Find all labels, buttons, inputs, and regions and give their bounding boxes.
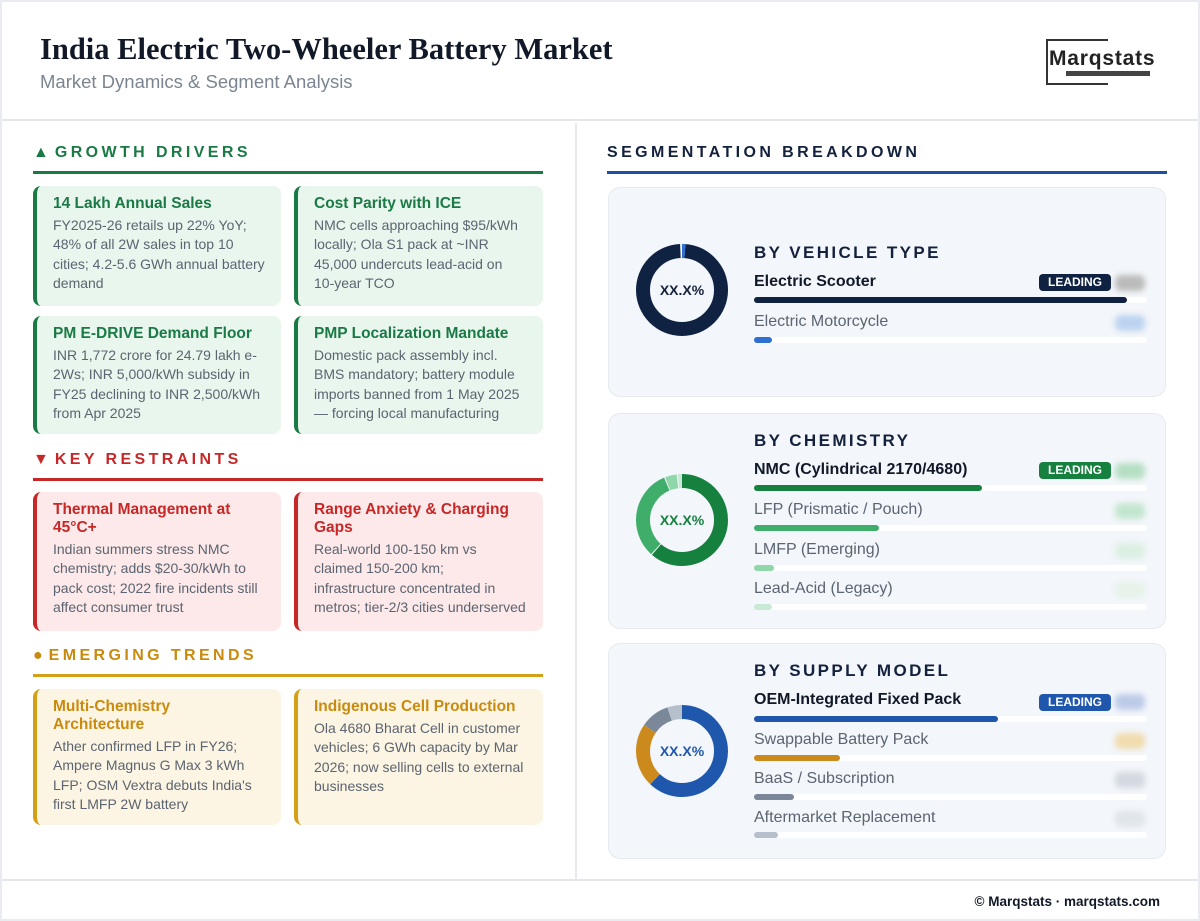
card: thermal: 45°C+ bbox=[53, 519, 97, 536]
card: PM E-DRIVE: 2Ws; INR 5,000/kWh subsidy in bbox=[53, 366, 250, 382]
card: PMP: Domestic pack assembly incl. bbox=[314, 347, 498, 363]
donut: supply: XX.X% bbox=[660, 743, 705, 759]
card: thermal bbox=[33, 492, 281, 631]
card: multi-chem bbox=[33, 689, 281, 825]
card: PMP: imports banned from 1 May 2025 bbox=[314, 386, 519, 402]
card: cost parity: locally; Ola S1 pack at ~INR bbox=[314, 236, 489, 252]
card: PM E-DRIVE: INR 1,772 crore for 24.79 lakh e- bbox=[53, 347, 257, 363]
card: 14 Lakh: 14 Lakh Annual Sales bbox=[53, 195, 212, 212]
card: PMP: BMS mandatory; battery module bbox=[314, 366, 515, 382]
card: 14 Lakh: cities; 4.2-5.6 GWh annual battery bbox=[53, 256, 265, 272]
subtitle: Market Dynamics & Segment Analysis bbox=[40, 71, 353, 92]
card: multi-chem: Architecture bbox=[53, 716, 144, 733]
donut: vehicle: XX.X% bbox=[660, 282, 705, 298]
card: cost parity: Cost Parity with ICE bbox=[314, 195, 461, 212]
card: 14 Lakh bbox=[33, 186, 281, 306]
card: range anxiety: infrastructure concentrated in bbox=[314, 580, 495, 596]
donut: chemistry bbox=[636, 474, 728, 566]
card: PM E-DRIVE: PM E-DRIVE Demand Floor bbox=[53, 325, 252, 342]
card: range anxiety: Range Anxiety & Charging bbox=[314, 501, 509, 518]
card: range anxiety bbox=[294, 492, 543, 631]
card: thermal: pack cost; 2022 fire incidents still bbox=[53, 580, 258, 596]
card: thermal: Thermal Management at bbox=[53, 501, 230, 518]
panel: supply model bbox=[608, 643, 1166, 859]
section heading: restraints: ▼ KEY RESTRAINTS bbox=[33, 451, 242, 468]
panel: chemistry: NMC (Cylindrical 2170/4680) bbox=[754, 461, 967, 478]
card: range anxiety: Gaps bbox=[314, 519, 353, 536]
panel: vehicle type bbox=[608, 187, 1166, 397]
card: cost parity: NMC cells approaching $95/kWh bbox=[314, 217, 518, 233]
donut: supply bbox=[636, 705, 728, 797]
panel: vehicle type: Electric Motorcycle bbox=[754, 313, 888, 330]
card: PM E-DRIVE: from Apr 2025 bbox=[53, 405, 141, 421]
panel: chemistry: Lead-Acid (Legacy) bbox=[754, 580, 893, 597]
card: 14 Lakh: demand bbox=[53, 275, 104, 291]
panel: supply model: OEM-Integrated Fixed Pack bbox=[754, 691, 961, 708]
card: range anxiety: Real-world 100-150 km vs bbox=[314, 541, 477, 557]
card: indigenous: Indigenous Cell Production bbox=[314, 698, 516, 715]
card: PM E-DRIVE bbox=[33, 316, 281, 434]
card: PMP bbox=[294, 316, 543, 434]
panel: chemistry: LMFP (Emerging) bbox=[754, 541, 880, 558]
panel: chemistry bbox=[608, 413, 1166, 629]
section heading: segmentation: SEGMENTATION BREAKDOWN bbox=[607, 144, 920, 161]
panel: supply model: BaaS / Subscription bbox=[754, 770, 895, 787]
divider bbox=[575, 123, 577, 880]
card: range anxiety: metros; tier-2/3 cities underserved bbox=[314, 599, 526, 615]
card: indigenous: vehicles; 6 GWh capacity by Mar bbox=[314, 739, 518, 755]
card: PM E-DRIVE: FY25 declining to INR 2,500/kWh bbox=[53, 386, 260, 402]
card: range anxiety: claimed 150-200 km; bbox=[314, 560, 444, 576]
header bbox=[2, 2, 1198, 121]
section heading: growth drivers: ▲ GROWTH DRIVERS bbox=[33, 144, 251, 161]
panel: vehicle type: BY VEHICLE TYPE bbox=[754, 243, 941, 262]
card: 14 Lakh: 48% of all 2W sales in top 10 bbox=[53, 236, 234, 252]
section heading: trends: ● EMERGING TRENDS bbox=[33, 647, 257, 664]
card: 14 Lakh: FY2025-26 retails up 22% YoY; bbox=[53, 217, 247, 233]
card: multi-chem: Ampere Magnus G Max 3 kWh bbox=[53, 757, 244, 773]
panel: vehicle type: LEADING bbox=[1048, 275, 1102, 289]
title: India Electric Two-Wheeler Battery Market bbox=[40, 32, 613, 66]
card: thermal: affect consumer trust bbox=[53, 599, 183, 615]
footer text: © Marqstats · marqstats.com bbox=[974, 894, 1160, 909]
card: indigenous: businesses bbox=[314, 778, 384, 794]
panel: supply model: Swappable Battery Pack bbox=[754, 731, 928, 748]
card: cost parity bbox=[294, 186, 543, 306]
panel: supply model: Aftermarket Replacement bbox=[754, 809, 935, 826]
panel: supply model: BY SUPPLY MODEL bbox=[754, 661, 950, 680]
card: multi-chem: Ather confirmed LFP in FY26; bbox=[53, 738, 237, 754]
panel: chemistry: BY CHEMISTRY bbox=[754, 431, 910, 450]
card: indigenous bbox=[294, 689, 543, 825]
logo bbox=[1046, 39, 1155, 85]
panel: chemistry: LEADING bbox=[1048, 463, 1102, 477]
donut: vehicle bbox=[636, 244, 728, 336]
card: indigenous: 2026; now selling cells to external bbox=[314, 759, 523, 775]
panel: supply model: LEADING bbox=[1048, 695, 1102, 709]
card: PMP: PMP Localization Mandate bbox=[314, 325, 508, 342]
card: cost parity: 10-year TCO bbox=[314, 275, 395, 291]
card: PMP: — forcing local manufacturing bbox=[314, 405, 499, 421]
card: multi-chem: Multi-Chemistry bbox=[53, 698, 170, 715]
panel: vehicle type: Electric Scooter bbox=[754, 273, 876, 290]
card: indigenous: Ola 4680 Bharat Cell in customer bbox=[314, 720, 520, 736]
card: cost parity: 45,000 undercuts lead-acid on bbox=[314, 256, 502, 272]
logo: Marqstats bbox=[1049, 47, 1155, 70]
card: thermal: chemistry; adds $20-30/kWh to bbox=[53, 560, 246, 576]
card: thermal: Indian summers stress NMC bbox=[53, 541, 230, 557]
card: multi-chem: first LMFP 2W battery bbox=[53, 796, 188, 812]
card: multi-chem: LFP; OSM Vextra debuts India's bbox=[53, 777, 252, 793]
donut: chemistry: XX.X% bbox=[660, 512, 705, 528]
panel: chemistry: LFP (Prismatic / Pouch) bbox=[754, 501, 923, 518]
footer bbox=[2, 879, 1198, 919]
